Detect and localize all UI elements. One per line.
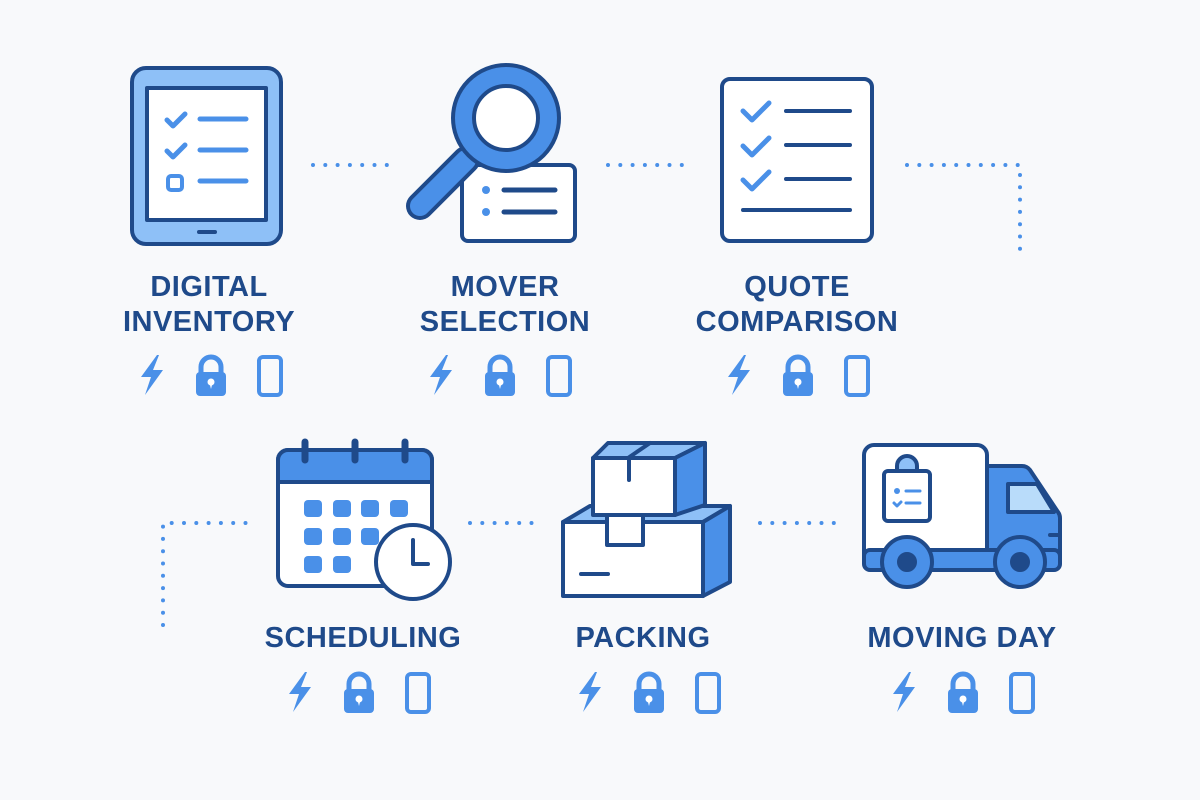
feature icons	[430, 355, 570, 396]
icon: calendar with clock	[278, 442, 450, 599]
connector: mover to quote	[608, 163, 688, 167]
icon: stacked boxes	[563, 443, 730, 596]
label: packing: PACKING	[575, 622, 711, 654]
step 2: mover selection	[420, 65, 590, 396]
label: mover selection: MOVER	[451, 271, 559, 303]
icon: checklist document	[722, 79, 872, 241]
feature icons	[289, 672, 429, 713]
step 3: quote comparison	[696, 79, 898, 396]
feature icons	[728, 355, 868, 396]
connector: scheduling to packing	[470, 521, 535, 525]
icon: tablet checklist	[132, 68, 281, 244]
step 5: packing	[563, 443, 730, 713]
label: digital inventory: DIGITAL	[150, 271, 268, 303]
label: digital inventory: INVENTORY	[123, 306, 295, 338]
step 1: digital inventory	[123, 68, 295, 396]
connector: inventory to mover	[313, 163, 392, 167]
label: mover selection: SELECTION	[420, 306, 590, 338]
connector: quote down	[907, 165, 1020, 258]
step 4: scheduling	[265, 442, 461, 713]
label: quote comparison: QUOTE	[744, 271, 850, 303]
connector: packing to moving day	[760, 521, 835, 525]
feature icons	[893, 672, 1033, 713]
step 6: moving day	[864, 445, 1060, 713]
label: scheduling: SCHEDULING	[265, 622, 461, 654]
label: quote comparison: COMPARISON	[696, 306, 898, 338]
icon: delivery truck	[864, 445, 1060, 587]
feature icons	[579, 672, 719, 713]
connector: left vertical into scheduling	[163, 523, 248, 625]
feature icons	[141, 355, 281, 396]
label: moving day: MOVING DAY	[867, 622, 1057, 654]
icon: magnifier and card	[420, 65, 575, 241]
